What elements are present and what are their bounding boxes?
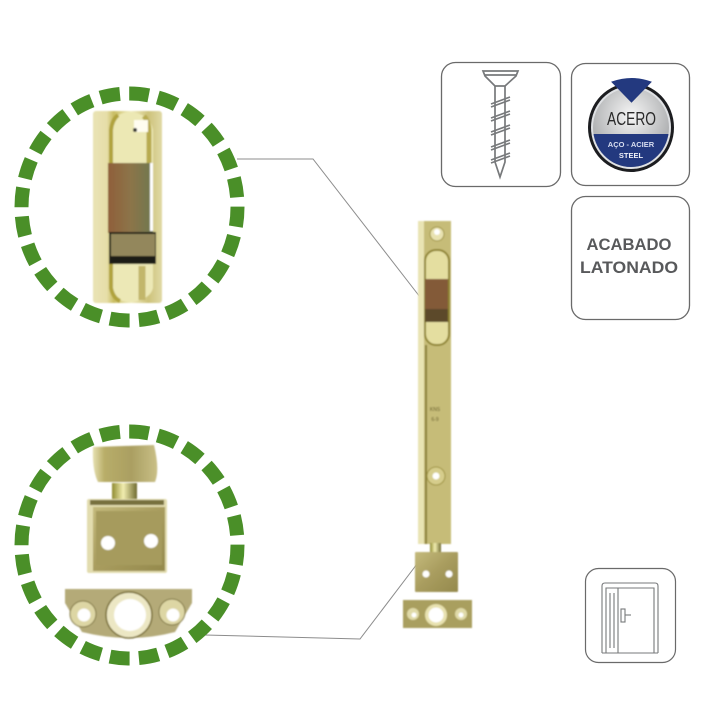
icon: screw: [483, 71, 518, 177]
panel: door icon: [586, 568, 676, 662]
sliding bolt handle: [425, 279, 448, 312]
pin: [430, 543, 441, 553]
close-up: bolt tip, block and strike plate: [65, 445, 192, 638]
strike plate: [403, 600, 472, 628]
panel: steel badge: [572, 64, 690, 186]
dashed green ring (bottom): [22, 432, 238, 658]
icon: door: [602, 583, 658, 653]
close-up: bolt slide: [93, 111, 162, 303]
icon: acero seal: ACERO: [607, 109, 656, 129]
product: full flush bolt: 6-9: [431, 417, 439, 423]
top screw: [430, 227, 444, 241]
connector line: bottom detail to strike: [205, 564, 417, 639]
block: [415, 552, 458, 592]
bolt body: [418, 221, 451, 544]
bottom detail: dashed circle with strike close-up: [22, 432, 238, 658]
product: full flush bolt: [403, 221, 472, 628]
top detail: dashed circle with bolt close-up: [22, 94, 238, 320]
icon: acero seal: [588, 78, 674, 174]
panel: screw icon: [442, 62, 560, 186]
panel: finish label: [572, 196, 690, 320]
lower screw: [427, 467, 445, 485]
icon: acero seal: AÇO - ACIER: [608, 140, 655, 149]
text: acabado latonado: LATONADO: [580, 258, 678, 277]
slot recess: [425, 250, 449, 345]
text: acabado latonado: ACABADO: [586, 235, 672, 254]
connector line: top detail to bolt: [237, 159, 420, 297]
dashed green ring (top): [22, 94, 238, 320]
icon: acero seal: STEEL: [619, 151, 644, 160]
text: acabado latonado: [580, 235, 678, 277]
engraved mark: KNS: [430, 407, 441, 413]
